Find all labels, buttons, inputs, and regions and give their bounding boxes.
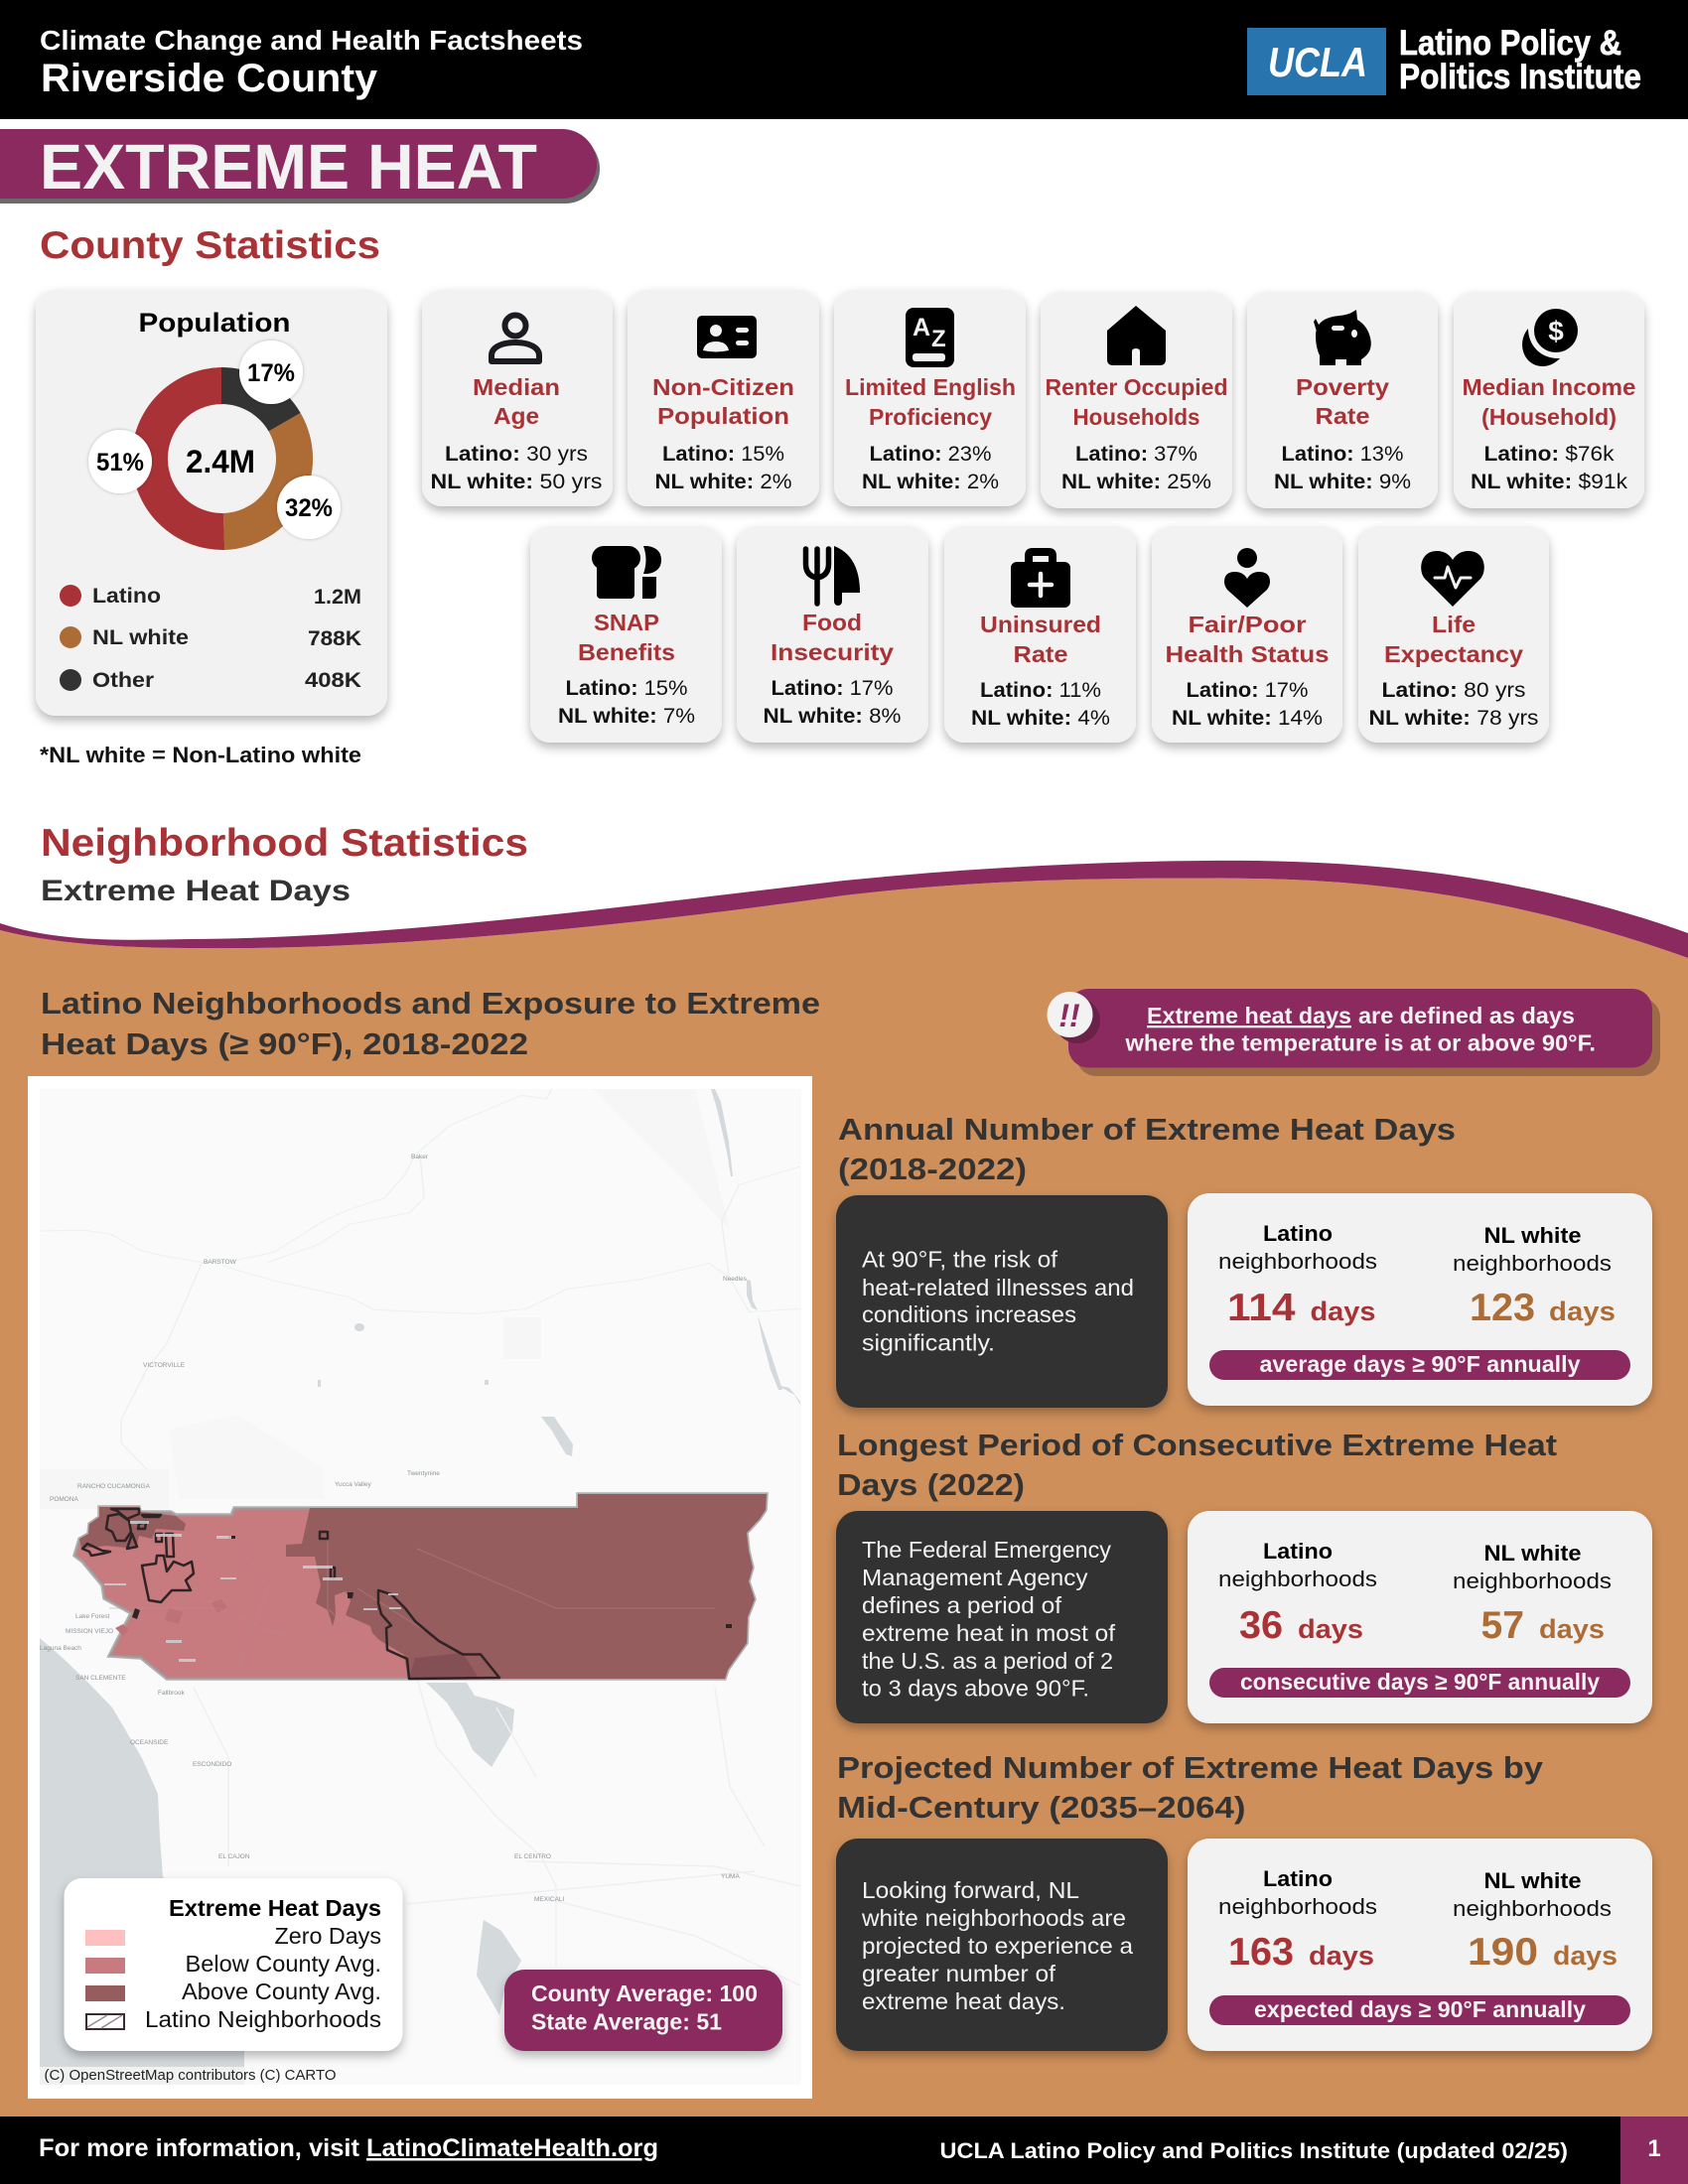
card: food insecurity: NL white: 8% — [763, 704, 902, 728]
dark note: to 3 days above 90°F. — [862, 1676, 1089, 1702]
comparison card: NL white — [1483, 1868, 1581, 1893]
heading: latino neighborhoods map: Latino Neighborhoods and Exposure to Extreme — [41, 986, 820, 1021]
population legend: 1.2M — [314, 586, 361, 609]
map labels: Needles — [723, 1276, 748, 1283]
card: median age: Median — [473, 374, 560, 400]
map labels: SAN CLEMENTE — [75, 1675, 126, 1682]
icon: house — [1107, 306, 1166, 365]
comparison card: days — [1553, 1941, 1618, 1971]
dark note: Management Agency — [862, 1565, 1088, 1590]
dark note: The Federal Emergency — [862, 1537, 1111, 1563]
card: non-citizen population: NL white: 2% — [655, 470, 792, 493]
icon: dictionary: Z — [931, 326, 946, 352]
dark note: conditions increases — [862, 1301, 1076, 1327]
population legend: NL white — [92, 626, 189, 649]
icon: person — [492, 316, 539, 361]
panel: population — [36, 290, 387, 716]
icon: fork and knife — [806, 546, 860, 606]
donut chart: 32% — [285, 494, 333, 522]
card: fair/poor health status: Fair/Poor — [1188, 612, 1307, 637]
latino neighborhood outlines — [82, 1509, 499, 1679]
card: food insecurity — [737, 526, 928, 743]
map legend: Zero Days — [274, 1923, 381, 1949]
card: poverty rate: Poverty — [1296, 374, 1389, 400]
section heading: (2018-2022) — [838, 1152, 1027, 1186]
donut chart: 2.4M — [186, 444, 255, 479]
card: non-citizen population: Non-Citizen — [652, 374, 794, 400]
card: limited english proficiency: Proficiency — [869, 404, 992, 430]
icon: dictionary — [906, 308, 954, 367]
header title: factsheet series: Climate Change and Health Factsheets — [40, 25, 583, 56]
card: renter occupied households: Renter Occupied — [1045, 374, 1227, 400]
map labels: EL CENTRO — [514, 1853, 551, 1860]
comparison card: Latino — [1263, 1221, 1333, 1246]
card: median age: Latino: 30 yrs — [445, 442, 588, 466]
card: limited english proficiency: NL white: 2% — [862, 470, 999, 493]
card: poverty rate — [1247, 292, 1438, 508]
comparison card: days — [1298, 1614, 1363, 1644]
comparison card: NL white — [1483, 1223, 1581, 1248]
population legend: Latino — [92, 585, 161, 608]
comparison card: Latino — [1263, 1539, 1333, 1564]
card: limited english proficiency — [834, 290, 1026, 506]
icon: alert — [1047, 992, 1100, 1043]
map legend: Above County Avg. — [182, 1979, 381, 2004]
page number: 1 — [1647, 2135, 1661, 2162]
card: median income — [1454, 292, 1644, 508]
callout: county and state average: State Average: 51 — [531, 2009, 722, 2035]
dark note: greater number of — [862, 1961, 1056, 1986]
icon: person with heart — [1224, 548, 1270, 608]
map labels: POMONA — [50, 1496, 79, 1503]
map labels: VICTORVILLE — [143, 1362, 186, 1369]
comparison card: expected days ≥ 90°F annually — [1254, 1996, 1586, 2022]
comparison card — [1188, 1193, 1652, 1406]
icon: coins: $ — [1548, 316, 1564, 346]
heading: neighborhood statistics: Neighborhood Statistics — [41, 822, 528, 865]
footer — [0, 2116, 1688, 2184]
card: snap benefits: NL white: 7% — [558, 704, 695, 728]
comparison card: 114 — [1227, 1287, 1296, 1329]
comparison card: neighborhoods — [1453, 1569, 1612, 1593]
banner: extreme heat: EXTREME HEAT — [40, 131, 537, 203]
icon: id card — [697, 316, 757, 358]
section heading: Annual Number of Extreme Heat Days — [838, 1112, 1456, 1147]
dark note: extreme heat days. — [862, 1988, 1065, 2014]
card: median age: Age — [493, 403, 539, 429]
donut chart: 17% — [247, 359, 295, 387]
heading: latino neighborhoods map — [41, 986, 820, 1061]
below county average area — [74, 1494, 767, 1679]
dark note: extreme heat in most of — [862, 1620, 1116, 1646]
card: limited english proficiency: Latino: 23% — [870, 442, 991, 466]
dark note — [836, 1839, 1168, 2051]
icon: alert: !! — [1058, 998, 1080, 1033]
card: snap benefits: Latino: 15% — [566, 676, 687, 700]
card: poverty rate: Latino: 13% — [1281, 442, 1404, 466]
map labels: Yucca Valley — [335, 1481, 371, 1488]
map labels: Baker — [411, 1154, 429, 1160]
above county average area — [79, 1494, 767, 1679]
section: longest period of consecutive heat days — [836, 1428, 1652, 1723]
panel: map — [28, 1076, 812, 2099]
map labels: YUMA — [721, 1873, 740, 1880]
UCLA logo: Politics Institute — [1399, 58, 1641, 96]
footer link text: LatinoClimateHealth.org — [366, 2134, 658, 2162]
header title: county: Riverside County — [41, 57, 378, 100]
section heading: Longest Period of Consecutive Extreme Heat — [837, 1428, 1557, 1462]
section heading: Projected Number of Extreme Heat Days by — [837, 1750, 1544, 1785]
callout: extreme heat definition: where the temperature is at or above 90°F. — [1124, 1030, 1596, 1056]
population legend: Other — [92, 669, 154, 692]
section heading — [837, 1428, 1557, 1502]
comparison card: NL white — [1483, 1541, 1581, 1566]
comparison card: days — [1549, 1297, 1616, 1326]
map labels: MISSION VIEJO — [66, 1628, 113, 1635]
card: fair/poor health status: Health Status — [1166, 641, 1329, 667]
card: limited english proficiency: Limited English — [845, 374, 1016, 400]
choropleth: riverside county — [74, 1494, 767, 1679]
comparison card: 123 — [1470, 1287, 1535, 1329]
comparison card: neighborhoods — [1453, 1896, 1612, 1921]
card: uninsured rate: Uninsured — [980, 612, 1101, 637]
dark note: defines a period of — [862, 1592, 1062, 1618]
card: median age — [422, 290, 613, 506]
dark note: white neighborhoods are — [861, 1905, 1126, 1931]
card: median income: NL white: $91k — [1471, 470, 1627, 493]
map labels: Lake Forest — [75, 1613, 110, 1620]
card: renter occupied households — [1041, 292, 1232, 508]
card: life expectancy: Expectancy — [1384, 641, 1523, 667]
card: non-citizen population: Population — [657, 403, 789, 429]
comparison card: neighborhoods — [1218, 1249, 1377, 1274]
map legend: Latino Neighborhoods — [145, 2006, 381, 2032]
footer credit: UCLA Latino Policy and Politics Institute (updated 02/25) — [939, 2138, 1568, 2163]
comparison card: consecutive days ≥ 90°F annually — [1240, 1669, 1600, 1695]
card: uninsured rate: NL white: 4% — [971, 706, 1110, 730]
callout: extreme heat definition: are defined as days — [1358, 1003, 1575, 1028]
card: life expectancy: Life — [1432, 612, 1476, 637]
card: food insecurity: Latino: 17% — [771, 676, 894, 700]
comparison card: days — [1539, 1614, 1605, 1644]
map labels: ESCONDIDO — [193, 1761, 231, 1768]
callout: extreme heat definition: Extreme heat days — [1147, 1003, 1351, 1028]
section: projected extreme heat days — [836, 1750, 1652, 2051]
map legend — [64, 1878, 403, 2051]
card: uninsured rate: Latino: 11% — [980, 678, 1101, 702]
card: food insecurity: Insecurity — [771, 639, 894, 665]
heading: latino neighborhoods map: Heat Days (≥ 90°F), 2018-2022 — [41, 1026, 528, 1061]
dark note: At 90°F, the risk of — [862, 1247, 1058, 1273]
dark note: significantly. — [862, 1330, 995, 1356]
comparison card: days — [1311, 1297, 1376, 1326]
icon: coins — [1522, 309, 1578, 366]
comparison card — [1188, 1511, 1652, 1723]
map labels: OCEANSIDE — [130, 1739, 169, 1746]
map labels: Laguna Beach — [40, 1645, 81, 1652]
card: snap benefits: SNAP — [594, 610, 659, 635]
card: uninsured rate: Rate — [1013, 641, 1068, 667]
UCLA logo: Latino Policy & — [1399, 24, 1621, 63]
comparison card: 57 — [1481, 1604, 1524, 1647]
map labels: RANCHO CUCAMONGA — [77, 1483, 151, 1490]
card: snap benefits: Benefits — [578, 639, 675, 665]
orange background with wave — [0, 861, 1688, 2116]
card: life expectancy: NL white: 78 yrs — [1368, 706, 1539, 730]
population heading: Population — [139, 308, 290, 338]
dark note: Looking forward, NL — [862, 1877, 1079, 1903]
card: renter occupied households: Households — [1072, 404, 1199, 430]
comparison card: 190 — [1468, 1931, 1538, 1974]
comparison card — [1188, 1839, 1652, 2051]
map base: land tints, water and roads — [40, 1089, 800, 2085]
card: food insecurity: Food — [802, 610, 862, 635]
card: renter occupied households: Latino: 37% — [1075, 442, 1197, 466]
map labels: EL CAJON — [218, 1853, 250, 1860]
header bar — [0, 0, 1688, 119]
card: median income: Median Income — [1462, 374, 1636, 400]
section heading — [838, 1112, 1456, 1186]
card: poverty rate: Rate — [1315, 403, 1370, 429]
footnote: *NL white = Non-Latino white — [40, 743, 361, 767]
map attribution: (C) OpenStreetMap contributors (C) CARTO — [44, 2067, 336, 2084]
UCLA logo — [1247, 24, 1641, 96]
dark note — [836, 1195, 1168, 1408]
donut chart — [88, 341, 341, 550]
icon: dictionary: A — [913, 314, 930, 341]
dark note: the U.S. as a period of 2 — [862, 1648, 1113, 1674]
card: fair/poor health status: NL white: 14% — [1172, 706, 1323, 730]
subheading: extreme heat days: Extreme Heat Days — [41, 875, 351, 907]
card: median income: Latino: $76k — [1483, 442, 1615, 466]
map labels: Twentynine — [407, 1470, 440, 1477]
card: uninsured rate — [944, 526, 1136, 743]
card: fair/poor health status: Latino: 17% — [1186, 678, 1309, 702]
section heading — [837, 1750, 1544, 1825]
dark note — [836, 1511, 1168, 1723]
comparison card: 36 — [1239, 1604, 1283, 1647]
card: non-citizen population — [628, 290, 819, 506]
heading: county statistics: County Statistics — [40, 224, 380, 267]
card: life expectancy: Latino: 80 yrs — [1382, 678, 1525, 702]
icon: piggy bank — [1314, 310, 1371, 365]
footer link text — [39, 2134, 658, 2162]
card: renter occupied households: NL white: 25% — [1061, 470, 1211, 493]
donut chart: 51% — [96, 449, 144, 477]
legend title: Extreme Heat Days — [169, 1895, 381, 1921]
card: median income: (Household) — [1481, 404, 1617, 430]
callout: county and state average — [504, 1970, 782, 2051]
city label chips — [104, 1521, 401, 1662]
card: snap benefits — [530, 526, 722, 743]
card: median age: NL white: 50 yrs — [431, 470, 602, 493]
population legend: 788K — [308, 627, 361, 650]
map labels — [40, 1154, 748, 1903]
section: annual number of extreme heat days — [836, 1112, 1652, 1408]
dark note: heat-related illnesses and — [862, 1275, 1134, 1300]
section heading: Mid-Century (2035–2064) — [837, 1790, 1245, 1825]
comparison card: Latino — [1263, 1866, 1333, 1891]
comparison card: neighborhoods — [1453, 1251, 1612, 1276]
comparison card: days — [1309, 1941, 1374, 1971]
card: life expectancy — [1358, 526, 1549, 743]
map labels: Fallbrook — [158, 1690, 185, 1697]
UCLA logo: UCLA — [1268, 39, 1367, 85]
icon: heart with pulse — [1421, 551, 1484, 607]
icon: bread — [592, 546, 661, 599]
card: fair/poor health status — [1152, 526, 1342, 743]
page number — [1620, 2116, 1688, 2184]
map legend: Below County Avg. — [185, 1951, 381, 1977]
comparison card: average days ≥ 90°F annually — [1259, 1351, 1581, 1377]
section heading: Days (2022) — [837, 1467, 1025, 1502]
comparison card: 163 — [1228, 1931, 1294, 1974]
population legend — [60, 585, 361, 692]
card: poverty rate: NL white: 9% — [1274, 470, 1411, 493]
map labels: MEXICALI — [534, 1896, 565, 1903]
comparison card: neighborhoods — [1218, 1567, 1377, 1591]
icon: medical kit — [1011, 548, 1070, 608]
comparison card: neighborhoods — [1218, 1894, 1377, 1919]
dark note: projected to experience a — [862, 1933, 1133, 1959]
population legend: 408K — [305, 669, 361, 692]
callout: county and state average: County Average: 100 — [531, 1980, 758, 2006]
card: non-citizen population: Latino: 15% — [662, 442, 784, 466]
callout: extreme heat definition — [1047, 989, 1660, 1076]
map labels: BARSTOW — [204, 1259, 237, 1266]
footer link text: For more information, visit — [39, 2134, 360, 2162]
